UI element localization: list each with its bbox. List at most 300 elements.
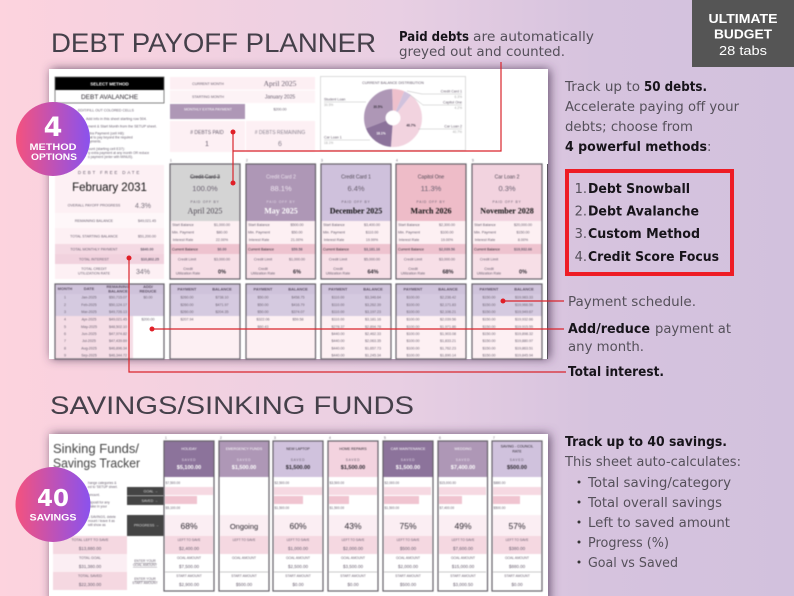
savings totals: $31,380.00 bbox=[79, 564, 102, 569]
savings card 5: car maintenance: $1,500.00 bbox=[396, 465, 420, 471]
arrow: total interest connector bbox=[126, 256, 566, 372]
instructions text bbox=[78, 108, 157, 159]
schedule table: debt 4: $100.00 bbox=[406, 296, 420, 300]
debt card 5: car loan 2: Start Balance bbox=[474, 223, 496, 227]
savings card 6: wedding: $15,000.00 bbox=[452, 564, 475, 569]
schedule table: month, date, balance, adjust: Jul-2025 bbox=[82, 339, 96, 343]
savings card 3: new laptop: $2,500.00 bbox=[274, 481, 289, 485]
panel: debt planner spreadsheet bbox=[49, 69, 548, 359]
schedule table: debt 2: $50.00 bbox=[258, 303, 268, 307]
text block: track up to 40 savings: Track up to 40 savings. bbox=[565, 435, 727, 450]
callout: four methods list: 2. bbox=[575, 204, 587, 220]
schedule table: debt 3: $440.00 bbox=[332, 339, 344, 343]
debt card 1: credit card 3: Start Balance bbox=[172, 223, 194, 227]
schedule table: debt 1: BALANCE bbox=[212, 286, 232, 292]
schedule table: month, date, balance, adjust: DATE bbox=[84, 286, 95, 291]
schedule table: debt 3: PAYMENT bbox=[329, 286, 348, 292]
callout: paid debts: are automatically bbox=[473, 30, 594, 45]
chart: current balance distribution donut: 40.7% bbox=[453, 130, 462, 134]
savings card 4: home repairs bbox=[328, 436, 378, 591]
instructions text: hat to pay beyond the required bbox=[88, 136, 133, 140]
text block: track up to 40 savings bbox=[564, 435, 741, 571]
debt card 5: car loan 2: Credit bbox=[484, 267, 494, 271]
savings card 7: saving council rate: 57% bbox=[508, 521, 526, 531]
schedule table: month, date, balance, adjust: 2 bbox=[64, 303, 66, 307]
debt free date summary: OVERALL PAYOFF PROGRESS bbox=[68, 204, 121, 208]
savings card 5: car maintenance: 5 bbox=[384, 436, 386, 440]
schedule table: debt 4: $2,171.83 bbox=[440, 303, 456, 307]
callout: four methods list: Credit Score Focus bbox=[588, 250, 719, 265]
debt card 4: capitol one: Credit Limit bbox=[404, 258, 422, 262]
schedule table: month, date, balance, adjust: $46,896.34 bbox=[109, 346, 127, 350]
schedule table: month, date, balance, adjust: 6 bbox=[64, 332, 66, 336]
schedule table: debt 4: $1,903.08 bbox=[440, 332, 456, 336]
savings card 1: holiday bbox=[164, 436, 214, 591]
debt card 1: credit card 3: $80.00 bbox=[216, 230, 228, 234]
schedule table: month, date, balance, adjust: BALANCE bbox=[108, 288, 128, 294]
schedule table: debt 3 bbox=[321, 284, 391, 359]
schedule table: debt 1: PAYMENT bbox=[178, 286, 197, 292]
instructions text: xtra Payment (cell H8): bbox=[88, 132, 125, 136]
savings card 6: wedding: WEDDING bbox=[454, 447, 472, 451]
savings card 1: holiday: HOLIDAY bbox=[181, 447, 197, 451]
schedule table: debt 2: $322.06 bbox=[256, 318, 270, 322]
debt card 4: capitol one: 4 bbox=[396, 158, 398, 162]
savings card 7: saving council rate: $880.00 bbox=[494, 481, 506, 485]
debt card 2: credit card 2: 6% bbox=[293, 270, 301, 276]
chart: current balance distribution donut: Capitol One bbox=[443, 100, 462, 104]
savings instructions: amount. bbox=[88, 493, 100, 497]
schedule table: debt 5: $150.00 bbox=[482, 318, 496, 322]
savings totals: TOTAL GOAL bbox=[79, 556, 101, 560]
debt card 2: credit card 2: May 2025 bbox=[264, 206, 298, 216]
text block: track up to 50 debts bbox=[564, 80, 740, 155]
schedule table: month, date, balance, adjust: Aug-2025 bbox=[81, 346, 97, 350]
savings card 4: home repairs: LEFT TO SAVE bbox=[342, 538, 365, 542]
savings instructions: hange categories & bbox=[88, 481, 117, 485]
schedule table: month, date, balance, adjust: $50,715.07 bbox=[109, 296, 127, 300]
debt card 3: credit card 1: Start Balance bbox=[323, 223, 345, 227]
callout: paid debts: Paid debts bbox=[399, 30, 469, 45]
savings instructions: mount / leave it as bbox=[88, 519, 115, 523]
schedule table: debt 1 bbox=[170, 284, 240, 359]
schedule table: debt 2: $50.00 bbox=[258, 296, 268, 300]
savings instructions bbox=[88, 481, 118, 527]
savings card 4: home repairs: $2,000.00 bbox=[343, 546, 364, 551]
savings card 5: car maintenance: LEFT TO SAVE bbox=[397, 538, 420, 542]
debt card 4: capitol one: PAID OFF BY bbox=[416, 200, 446, 204]
savings card 6: wedding: START AMOUNT bbox=[450, 574, 476, 578]
savings card 3: new laptop: START AMOUNT bbox=[285, 574, 311, 578]
savings card 7: saving council rate: $0.00 bbox=[511, 582, 523, 587]
schedule table: debt 3: $3,262.39 bbox=[365, 303, 381, 307]
schedule table: debt 1: $207.94 bbox=[180, 318, 194, 322]
debt card 2: credit card 2: Credit bbox=[258, 267, 268, 271]
schedule table: debt 1: $260.00 bbox=[180, 310, 194, 314]
debt card 2: credit card 2: Credit Card 2 bbox=[266, 174, 296, 180]
schedule table: debt 4: $1,971.86 bbox=[440, 325, 456, 329]
debt card 5: car loan 2: $19,932.66 bbox=[514, 248, 532, 252]
schedule table: month, date, balance, adjust bbox=[55, 284, 164, 359]
debt card 2: credit card 2: Start Balance bbox=[248, 223, 270, 227]
method selector: DEBT AVALANCHE bbox=[81, 94, 139, 101]
schedule table: debt 4: $1,690.14 bbox=[440, 354, 456, 358]
schedule table: debt 3: $110.00 bbox=[332, 310, 344, 314]
debt card 3: credit card 1: Current Balance bbox=[323, 248, 349, 252]
badge: 40 savings: SAVINGS bbox=[30, 512, 76, 522]
debt card 2: credit card 2: 2 bbox=[246, 158, 248, 162]
savings card 2: emergency funds: SAVED bbox=[237, 458, 251, 462]
chart: current balance distribution donut: 6.3% bbox=[454, 95, 462, 99]
current month block: $200.00 bbox=[274, 108, 286, 112]
savings card 4: home repairs: $3,500.00 bbox=[343, 564, 364, 569]
schedule table: debt 3: $110.00 bbox=[332, 303, 344, 307]
badge: ultimate budget 28 tabs: BUDGET bbox=[714, 26, 772, 42]
schedule table: debt 5: $19,880.97 bbox=[515, 339, 533, 343]
debt free date summary bbox=[55, 165, 164, 279]
savings card 4: home repairs: 4 bbox=[329, 436, 331, 440]
schedule table: debt 3: $1,245.34 bbox=[365, 354, 381, 358]
debt card 1: credit card 3: 0% bbox=[218, 270, 226, 276]
chart: current balance distribution donut: 18.1% bbox=[376, 132, 386, 136]
heading: savings and sinking funds: SAVINGS/SINKING FUNDS bbox=[50, 392, 414, 420]
instructions text: Add info in this sheet starting row 504. bbox=[86, 117, 147, 121]
schedule table: month, date, balance, adjust: $46,344.72 bbox=[109, 354, 127, 358]
title: debt payoff planner: DEBT PAYOFF PLANNER bbox=[51, 28, 376, 58]
debt card 1: credit card 3: 100.0% bbox=[192, 184, 218, 193]
savings card 3: new laptop: LEFT TO SAVE bbox=[287, 538, 310, 542]
savings card 5: car maintenance: GOAL AMOUNT bbox=[396, 556, 420, 560]
debt free date summary: $840.00 bbox=[140, 248, 154, 252]
badge: ultimate budget 28 tabs bbox=[692, 0, 794, 67]
savings card 1: holiday: $7,500.00 bbox=[179, 564, 200, 569]
savings card 7: saving council rate: $880.00 bbox=[509, 564, 526, 569]
panel: savings tracker spreadsheet bbox=[49, 434, 548, 596]
schedule table: debt 5: $19,966.56 bbox=[515, 303, 533, 307]
schedule table: debt 3: $440.00 bbox=[332, 332, 344, 336]
savings card 4: home repairs: 43% bbox=[344, 521, 362, 531]
debt card 3: credit card 1: $3,400.00 bbox=[364, 223, 380, 227]
savings card 6: wedding: LEFT TO SAVE bbox=[452, 538, 475, 542]
debt free date summary: DEBT FREE DATE bbox=[78, 170, 141, 175]
arrow: paid debts connector bbox=[230, 62, 501, 186]
savings card 5: car maintenance: $500.00 bbox=[400, 582, 417, 587]
debt free date summary: $51,200.00 bbox=[138, 234, 156, 238]
schedule table: month, date, balance, adjust: 4 bbox=[64, 318, 66, 322]
label: payment schedule: Payment schedule. bbox=[568, 295, 696, 310]
current month block: MONTHLY EXTRA PAYMENT bbox=[184, 108, 233, 112]
badge: 40 savings bbox=[16, 467, 90, 542]
savings card 2: emergency funds: START AMOUNT bbox=[231, 574, 257, 578]
schedule table: month, date, balance, adjust: Sep-2025 bbox=[81, 354, 97, 358]
schedule table: debt 4: $100.00 bbox=[406, 310, 420, 314]
debt card 3: credit card 1: Utilization Rate bbox=[326, 272, 350, 276]
savings card 3: new laptop: $1,000.00 bbox=[288, 546, 309, 551]
schedule table: debt 4: $1,833.21 bbox=[440, 339, 456, 343]
savings totals: TOTAL LEFT TO SAVE bbox=[71, 538, 109, 542]
savings card 7: saving council rate bbox=[492, 436, 542, 591]
debt card 5: car loan 2: Utilization Rate bbox=[477, 272, 501, 276]
savings card 3: new laptop: 60% bbox=[289, 521, 307, 531]
debt free date summary: 34% bbox=[136, 269, 150, 276]
savings card 6: wedding bbox=[438, 436, 488, 591]
arrow: add or reduce connector bbox=[150, 326, 564, 332]
debt card 1: credit card 3: Credit Card 3 bbox=[190, 174, 220, 180]
savings card 7: saving council rate: SAVED bbox=[510, 458, 524, 462]
debt card 2: credit card 2 bbox=[246, 158, 316, 279]
savings card 7: saving council rate: RATE bbox=[512, 450, 522, 454]
label: total interest: Total interest. bbox=[568, 365, 664, 380]
savings card 2: emergency funds: Ongoing bbox=[230, 522, 258, 531]
schedule table: debt 1: $738.10 bbox=[216, 296, 228, 300]
text block: track up to 50 debts: debts; choose from bbox=[565, 120, 693, 135]
debt card 5: car loan 2: Interest Rate bbox=[475, 238, 495, 242]
chart: current balance distribution donut bbox=[320, 76, 466, 150]
savings card 5: car maintenance: 75% bbox=[399, 521, 417, 531]
row tags: goal, saved, progress: SAVED → bbox=[141, 499, 158, 503]
schedule table: debt 5: $150.00 bbox=[482, 354, 496, 358]
savings card 5: car maintenance: $500.00 bbox=[400, 546, 417, 551]
debt free date summary: TOTAL CREDIT bbox=[81, 267, 108, 271]
savings tracker title bbox=[53, 442, 140, 470]
debt card 4: capitol one: Capitol One bbox=[418, 174, 444, 180]
instructions text: ayments. bbox=[88, 140, 101, 144]
schedule table: debt 4: $2,106.21 bbox=[440, 310, 456, 314]
callout: four methods list bbox=[567, 171, 732, 274]
savings card 4: home repairs: $1,500.00 bbox=[330, 506, 344, 510]
debts paid counters: # DEBTS REMAINING bbox=[255, 130, 305, 136]
schedule table: month, date, balance, adjust: 7 bbox=[64, 339, 66, 343]
label: add or reduce payment: Add/reduce bbox=[568, 322, 650, 337]
savings card 5: car maintenance: $2,000.00 bbox=[398, 564, 419, 569]
debt card 5: car loan 2: $150.00 bbox=[516, 230, 530, 234]
schedule table: debt 5: $19,949.67 bbox=[515, 310, 533, 314]
schedule table: month, date, balance, adjust: REMAINING bbox=[107, 284, 129, 289]
schedule table: month, date, balance, adjust: Jun-2025 bbox=[82, 332, 96, 336]
text block: track up to 50 debts: Track up to bbox=[564, 80, 640, 95]
savings card 5: car maintenance: $1,500.00 bbox=[384, 506, 399, 510]
schedule table: debt 3: $278.37 bbox=[332, 325, 344, 329]
debt free date summary: REMAINING BALANCE bbox=[75, 219, 114, 223]
chart: current balance distribution donut: 4.2% bbox=[454, 106, 462, 110]
schedule table: debt 2: $59.58 bbox=[292, 318, 304, 322]
savings card 6: wedding: $3,000.50 bbox=[453, 582, 474, 587]
schedule table: debt 5 bbox=[472, 284, 542, 359]
callout: four methods list: Debt Snowball bbox=[588, 182, 690, 197]
debt card 3: credit card 1: Credit bbox=[333, 267, 343, 271]
schedule table: debt 3: $3,197.23 bbox=[365, 310, 381, 314]
savings card 1: holiday: GOAL AMOUNT bbox=[177, 556, 201, 560]
debt free date summary: February 2031 bbox=[72, 182, 147, 194]
current month block: April 2025 bbox=[264, 79, 297, 88]
savings card 3: new laptop: 3 bbox=[274, 436, 276, 440]
debt card 3: credit card 1: 64% bbox=[367, 270, 379, 276]
current month block bbox=[170, 77, 315, 119]
debt card 3: credit card 1: $5,000.00 bbox=[364, 258, 380, 262]
debt card 2: credit card 2: Credit Limit bbox=[254, 258, 272, 262]
debt card 1: credit card 3: Current Balance bbox=[172, 248, 198, 252]
schedule table: month, date, balance, adjust: Mar-2025 bbox=[81, 310, 97, 314]
debt card 5: car loan 2: 0% bbox=[519, 270, 527, 276]
schedule table: debt 3: $3,346.64 bbox=[365, 296, 381, 300]
chart: current balance distribution donut: Student Loan bbox=[324, 98, 345, 102]
savings card 2: emergency funds bbox=[219, 436, 269, 591]
schedule table: debt 4 bbox=[396, 284, 466, 359]
savings card 3: new laptop bbox=[273, 436, 323, 591]
savings tracker title: Savings Tracker bbox=[53, 456, 140, 470]
debt card 1: credit card 3: Min. Payment bbox=[172, 230, 194, 234]
schedule table: month, date, balance, adjust: $48,502.10 bbox=[109, 325, 127, 329]
row tags: goal, saved, progress: ENTER YOUR bbox=[134, 559, 156, 563]
savings instructions: ed to 'SETUP sheet. bbox=[88, 485, 118, 489]
schedule table: debt 4: $2,236.42 bbox=[440, 296, 456, 300]
schedule table: debt 5: $150.00 bbox=[482, 346, 496, 350]
savings card 7: saving council rate: $500.00 bbox=[507, 465, 527, 471]
schedule table: month, date, balance, adjust: $200.00 bbox=[142, 318, 154, 322]
savings card 3: new laptop: SAVED bbox=[291, 458, 305, 462]
schedule table: debt 2: $416.79 bbox=[292, 303, 304, 307]
row tags: goal, saved, progress: START AMOUNT bbox=[132, 581, 158, 585]
text block: track up to 50 debts: : bbox=[707, 140, 711, 155]
current month block: January 2025 bbox=[265, 94, 295, 100]
schedule table: debt 5: PAYMENT bbox=[480, 286, 499, 292]
arrow: payment schedule connector bbox=[500, 298, 564, 304]
debt card 4: capitol one: Credit bbox=[408, 267, 418, 271]
debt card 4: capitol one: Utilization Rate bbox=[401, 272, 425, 276]
savings card 3: new laptop: $1,500.00 bbox=[286, 465, 310, 471]
savings card 7: saving council rate: LEFT TO SAVE bbox=[506, 538, 529, 542]
schedule table: debt 3: $110.00 bbox=[332, 296, 344, 300]
debt card 3: credit card 1: Min. Payment bbox=[323, 230, 345, 234]
schedule table: debt 4: $100.00 bbox=[406, 346, 420, 350]
savings card 5: car maintenance: SAVED bbox=[401, 458, 415, 462]
schedule table: month, date, balance, adjust: REDUCE bbox=[140, 288, 157, 294]
savings card 1: holiday: SAVED bbox=[182, 458, 196, 462]
schedule table: debt 3: BALANCE bbox=[363, 286, 383, 292]
instructions text: ly extra payment at any month OR reduce bbox=[88, 151, 149, 155]
text block: track up to 40 savings: Progress (%) bbox=[588, 536, 669, 551]
schedule table: debt 3: $2,894.78 bbox=[365, 325, 381, 329]
schedule table: debt 4: BALANCE bbox=[438, 286, 458, 292]
callout: four methods list: 4. bbox=[575, 250, 587, 265]
schedule table: month, date, balance, adjust: $49,726.13 bbox=[109, 310, 127, 314]
schedule table: month, date, balance, adjust: Apr-2025 bbox=[82, 318, 96, 322]
debt card 4: capitol one: $3,000.00 bbox=[439, 258, 455, 262]
schedule table: month, date, balance, adjust: 3 bbox=[64, 310, 66, 314]
method selector bbox=[55, 77, 164, 103]
savings card 4: home repairs: START AMOUNT bbox=[340, 574, 366, 578]
savings card 6: wedding: $7,600.00 bbox=[453, 546, 474, 551]
schedule table: debt 3: $1,657.73 bbox=[365, 346, 381, 350]
schedule table: debt 5: $150.00 bbox=[482, 303, 496, 307]
debt card 3: credit card 1: PAID OFF BY bbox=[341, 200, 371, 204]
savings card 3: new laptop: $2,500.00 bbox=[288, 564, 309, 569]
debt card 5: car loan 2: 0.3% bbox=[498, 184, 516, 193]
instructions text: ment & Start Month from the SETUP sheet. bbox=[88, 124, 157, 128]
savings card 5: car maintenance bbox=[383, 436, 433, 591]
savings card 2: emergency funds: $500.00 bbox=[236, 582, 253, 587]
badge: 4 method options bbox=[16, 102, 90, 176]
schedule table: month, date, balance, adjust: $47,439.69 bbox=[109, 339, 127, 343]
debt card 3: credit card 1: Credit Limit bbox=[329, 258, 347, 262]
callout: four methods list: Custom Method bbox=[588, 227, 700, 242]
debt card 2: credit card 2: Min. Payment bbox=[248, 230, 270, 234]
debt card 1: credit card 3: $0.00 bbox=[218, 248, 226, 252]
chart: current balance distribution donut: Car Loan 2 bbox=[444, 124, 462, 128]
debt card 5: car loan 2: $20,000.00 bbox=[514, 223, 532, 227]
debt card 1: credit card 3: $1,000.00 bbox=[214, 223, 230, 227]
debt card 4: capitol one: $2,300.00 bbox=[439, 223, 455, 227]
debt card 4: capitol one: 19.00% bbox=[441, 238, 454, 242]
schedule table: debt 2: $374.07 bbox=[292, 310, 304, 314]
row tags: goal, saved, progress: GOAL AMOUNT bbox=[133, 563, 157, 567]
savings card 6: wedding: $7,400.00 bbox=[440, 506, 454, 510]
debt card 4: capitol one: 68% bbox=[442, 270, 454, 276]
schedule table: debt 3: $2,462.33 bbox=[365, 332, 381, 336]
schedule table: month, date, balance, adjust: $47,974.82 bbox=[109, 332, 127, 336]
schedule table: month, date, balance, adjust: 9 bbox=[64, 354, 66, 358]
savings card 6: wedding: 6 bbox=[439, 436, 441, 440]
badge: ultimate budget 28 tabs: ULTIMATE bbox=[708, 11, 778, 26]
chart: current balance distribution donut: 18.1% bbox=[324, 141, 333, 145]
savings card 2: emergency funds: 2 bbox=[220, 436, 222, 440]
savings card 4: home repairs: $0.00 bbox=[347, 582, 359, 587]
schedule table: month, date, balance, adjust: Feb-2025 bbox=[81, 303, 97, 307]
debt card 5: car loan 2: Credit Limit bbox=[480, 258, 498, 262]
chart: current balance distribution donut: 30.5% bbox=[324, 103, 333, 107]
savings card 3: new laptop: $0.00 bbox=[292, 582, 304, 587]
callout: four methods list: 1. bbox=[575, 182, 587, 197]
debt card 1: credit card 3: Interest Rate bbox=[173, 238, 193, 242]
badge: 4 method options: METHOD bbox=[30, 142, 77, 152]
schedule table: debt 4: $100.00 bbox=[406, 332, 420, 336]
savings card 6: wedding: SAVED bbox=[456, 458, 470, 462]
schedule table: debt 4: PAYMENT bbox=[404, 286, 423, 292]
savings card 2: emergency funds: LEFT TO SAVE bbox=[233, 538, 256, 542]
schedule table: debt 1: $204.35 bbox=[216, 310, 228, 314]
debt card 4: capitol one: Current Balance bbox=[398, 248, 424, 252]
instructions text: s payment (enter with MINUS). bbox=[88, 155, 133, 159]
debt card 3: credit card 1: $110.00 bbox=[366, 230, 378, 234]
callout: four methods list: Debt Avalanche bbox=[588, 204, 699, 220]
label: add or reduce payment bbox=[568, 322, 731, 355]
schedule table: debt 1: $260.00 bbox=[180, 296, 194, 300]
schedule table: debt 3: $3,181.16 bbox=[365, 318, 381, 322]
schedule table: debt 4: $100.00 bbox=[406, 318, 420, 322]
debt card 3: credit card 1: 6.4% bbox=[347, 184, 365, 193]
schedule table: month, date, balance, adjust: ADD/ bbox=[143, 284, 154, 289]
schedule table: debt 5: $150.00 bbox=[482, 339, 496, 343]
debt card 4: capitol one: Min. Payment bbox=[398, 230, 420, 234]
schedule table: debt 5: $19,932.66 bbox=[515, 318, 533, 322]
savings card 4: home repairs: GOAL AMOUNT bbox=[341, 556, 365, 560]
debt card 5: car loan 2: 5 bbox=[472, 158, 474, 162]
debt card 4: capitol one: $100.00 bbox=[440, 230, 454, 234]
savings card 2: emergency funds: EMERGENCY FUNDS bbox=[226, 447, 263, 451]
debt card 4: capitol one: $2,039.56 bbox=[439, 248, 455, 252]
row tags: goal, saved, progress: PROGRESS → bbox=[134, 524, 159, 528]
savings card 5: car maintenance: START AMOUNT bbox=[395, 574, 421, 578]
debts paid counters bbox=[170, 121, 315, 152]
savings card 4: home repairs: SAVED bbox=[346, 458, 360, 462]
schedule table: debt 1: $471.97 bbox=[216, 303, 228, 307]
savings instructions: L SAVINGS, delete bbox=[88, 515, 116, 519]
schedule table: debt 2: $50.00 bbox=[258, 310, 268, 314]
schedule table: debt 5: $19,863.51 bbox=[515, 346, 533, 350]
savings card 3: new laptop: GOAL AMOUNT bbox=[286, 556, 310, 560]
schedule table: debt 2: BALANCE bbox=[288, 286, 308, 292]
debt card 2: credit card 2: Interest Rate bbox=[249, 238, 269, 242]
